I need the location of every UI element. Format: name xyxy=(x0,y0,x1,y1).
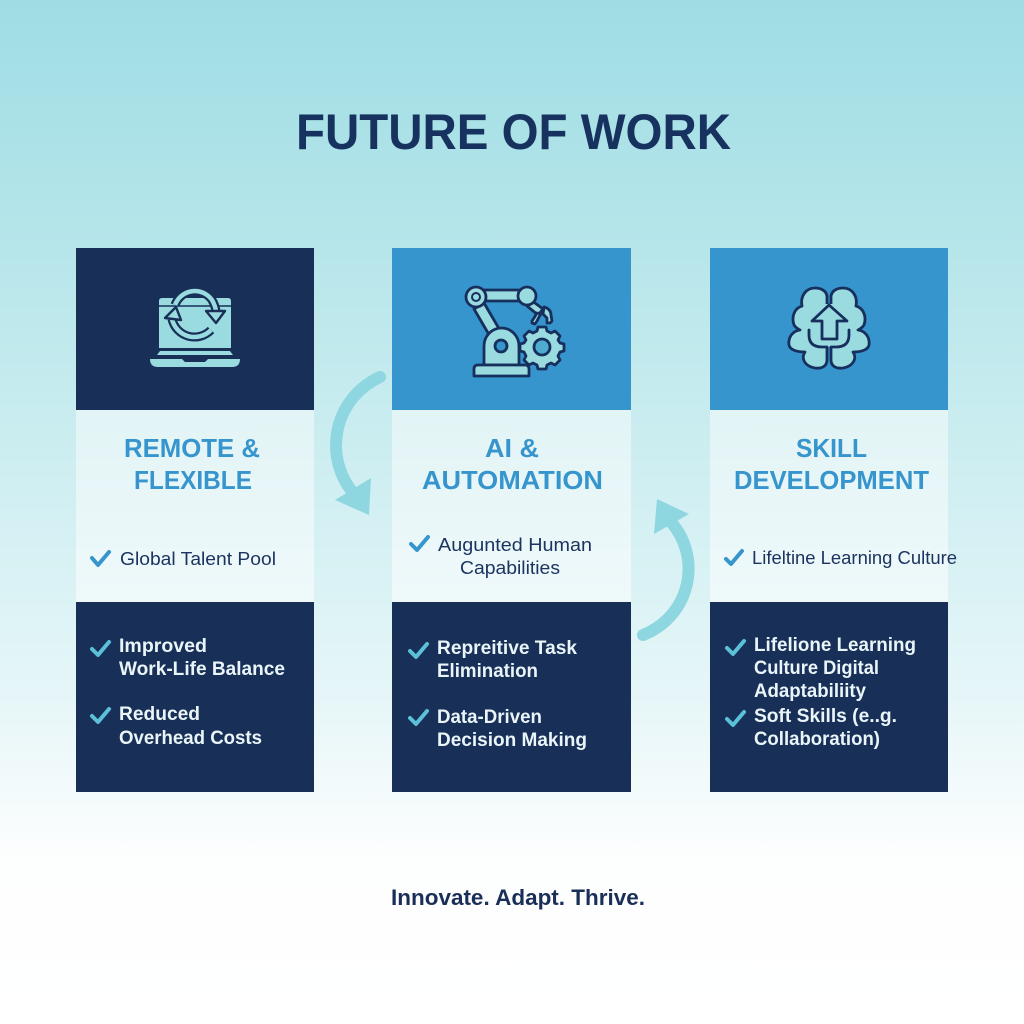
panel: remote and flexible xyxy=(76,248,314,792)
title: FUTURE OF WORK xyxy=(296,104,731,160)
check item: lifelong learning and adaptability: Lifelione Learning xyxy=(754,635,916,656)
panel footer: skill development xyxy=(710,602,948,792)
heading: remote and flexible: REMOTE & xyxy=(124,433,260,463)
icon: robot arm and gear xyxy=(466,287,564,376)
panel body: skill development xyxy=(710,410,948,602)
panel header: ai and automation xyxy=(392,248,631,410)
check item: overhead costs xyxy=(92,704,262,749)
panel body: remote and flexible xyxy=(76,410,314,602)
check item: augmented capabilities xyxy=(411,535,592,578)
check item: data-driven decisions xyxy=(410,707,587,751)
panel footer: ai and automation xyxy=(392,602,631,792)
panel header: remote and flexible xyxy=(76,248,314,410)
check item: data-driven decisions: Decision Making xyxy=(437,730,587,751)
check item: work-life balance xyxy=(92,636,285,680)
icon: brain with up arrow xyxy=(789,288,869,368)
panel body: ai and automation xyxy=(392,410,631,602)
check item: repetitive task elimination: Elimination xyxy=(437,661,538,682)
check item: work-life balance: Work-Life Balance xyxy=(119,659,285,680)
check item: soft skills xyxy=(727,706,897,750)
check item: augmented capabilities: Augunted Human xyxy=(438,535,592,555)
panel: ai and automation: AUTOMATION xyxy=(422,465,603,495)
panel footer: remote and flexible xyxy=(76,602,314,792)
check item: overhead costs: Overhead Costs xyxy=(119,728,262,749)
check item: lifelong learning and adaptability xyxy=(727,635,916,702)
check item: soft skills: Collaboration) xyxy=(754,729,880,750)
check item: soft skills: Soft Skills (e..g. xyxy=(754,706,897,727)
icon: laptop with sync arrows xyxy=(150,291,240,367)
check item: lifetime learning culture: Lifeltine Learning Culture xyxy=(752,548,957,568)
check item: work-life balance: Improved xyxy=(119,636,207,657)
check item: overhead costs: Reduced xyxy=(119,704,200,725)
check item: lifelong learning and adaptability: Adaptabiliity xyxy=(754,681,866,702)
panel: remote and flexible: FLEXIBLE xyxy=(134,465,252,495)
check item: lifelong learning and adaptability: Culture Digital xyxy=(754,658,879,679)
check item: augmented capabilities: Capabilities xyxy=(460,558,560,578)
panel: ai and automation xyxy=(392,248,631,792)
heading: skill development: SKILL xyxy=(796,433,867,463)
arrow: curving up from middle panel xyxy=(643,499,689,635)
tagline: Innovate. Adapt. Thrive. xyxy=(391,885,645,910)
check item: repetitive task elimination: Repreitive Task xyxy=(437,638,577,659)
check item: data-driven decisions: Data-Driven xyxy=(437,707,542,728)
check item: repetitive task elimination xyxy=(410,638,577,682)
panel header: skill development xyxy=(710,248,948,410)
heading: ai and automation: AI & xyxy=(485,433,539,463)
panel: skill development xyxy=(710,248,957,792)
arrow: curving down to middle panel xyxy=(335,377,380,515)
check item: global talent pool: Global Talent Pool xyxy=(120,549,276,569)
panel: skill development: DEVELOPMENT xyxy=(734,465,929,495)
